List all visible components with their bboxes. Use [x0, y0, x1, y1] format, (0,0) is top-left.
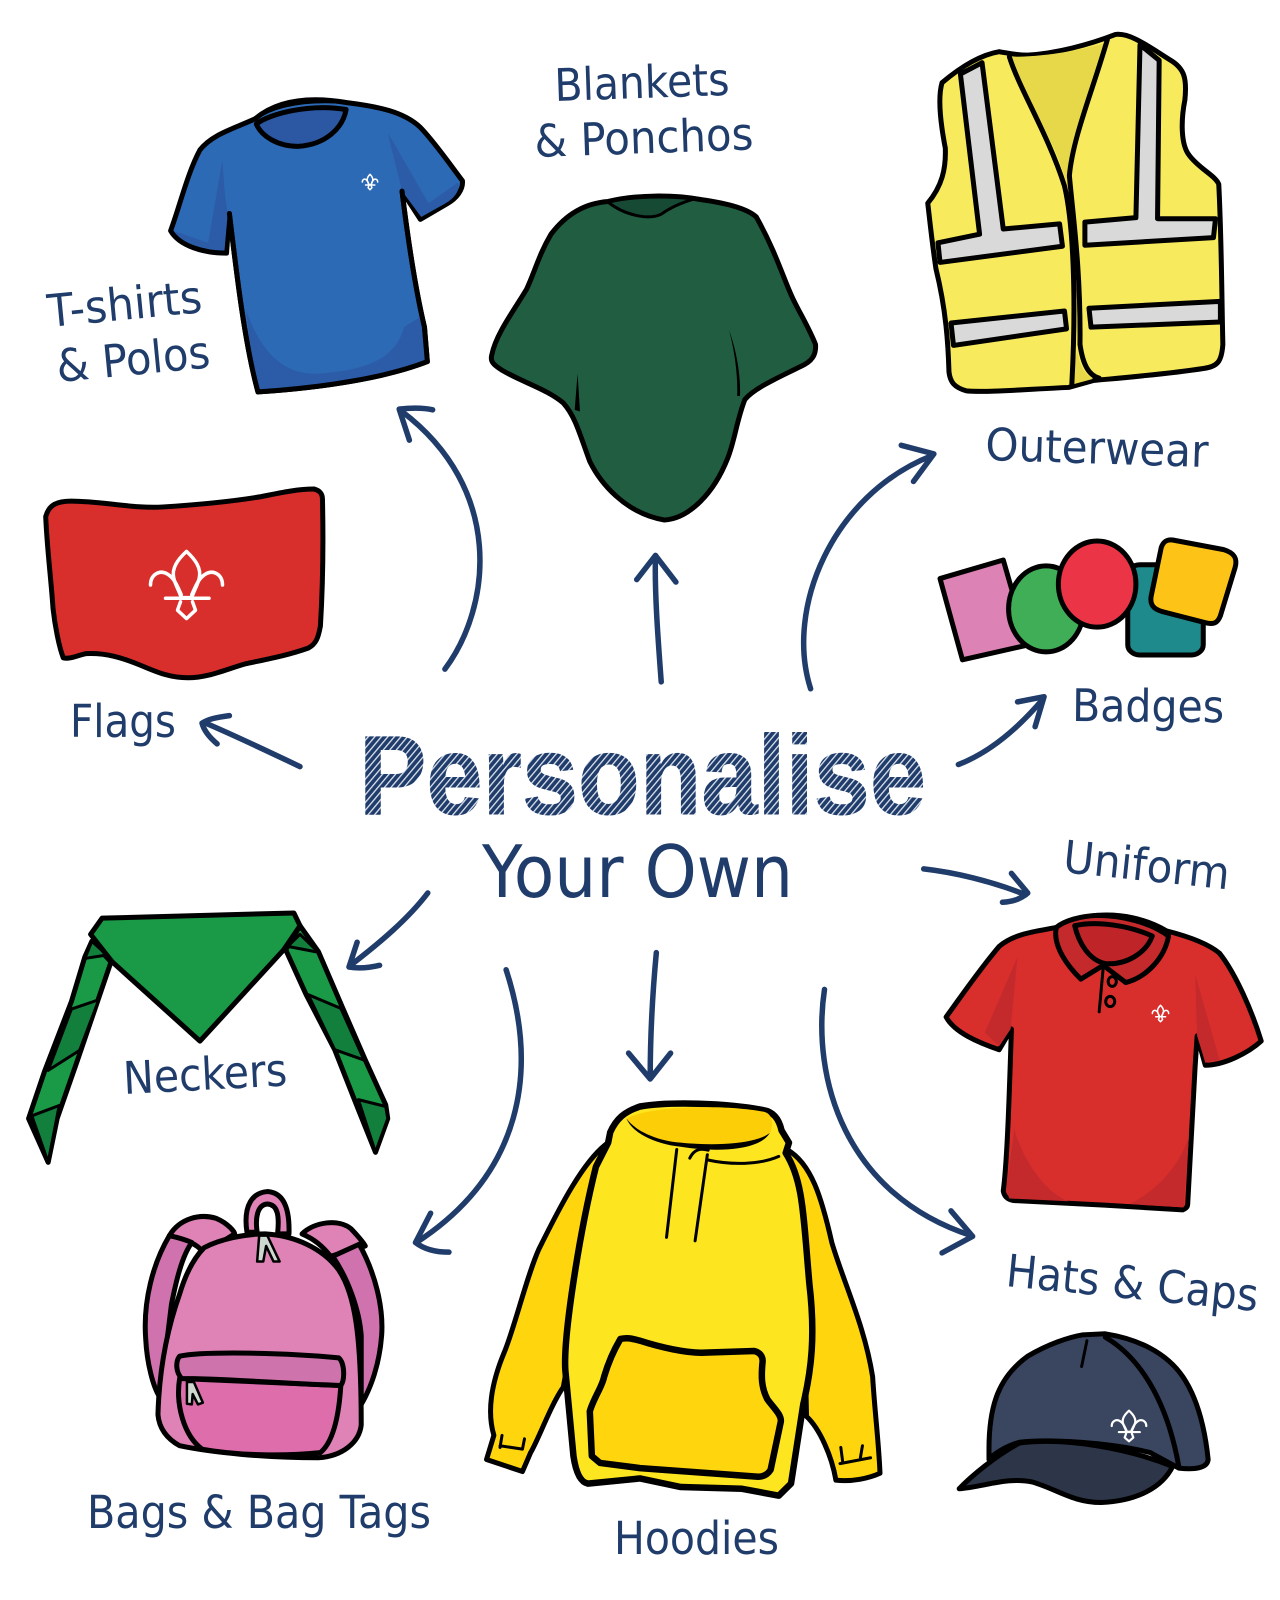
arrow to hoodies — [629, 953, 671, 1079]
icon: fleur-de-lis on cap — [1112, 1411, 1146, 1441]
icon: yellow hoodie — [487, 1103, 880, 1496]
icon: pink backpack — [145, 1192, 382, 1458]
icon: fleur-de-lis on t-shirt — [362, 174, 378, 190]
icon: fleur-de-lis on polo — [1152, 1005, 1169, 1022]
arrow to ponchos — [637, 555, 676, 682]
icon: badges — [940, 540, 1236, 660]
arrow to hats — [822, 989, 973, 1253]
icon: navy cap — [959, 1334, 1208, 1503]
icon: red polo shirt — [946, 915, 1261, 1210]
subtitle: Your Own — [481, 830, 793, 914]
label: hoodies: Hoodies — [614, 1512, 779, 1565]
icon: fleur-de-lis on flag — [150, 551, 222, 619]
label: hats and caps: Hats & Caps — [1004, 1244, 1261, 1322]
icon: green necker — [29, 913, 388, 1162]
label: badges: Badges — [1072, 679, 1224, 733]
label: uniform: Uniform — [1061, 830, 1232, 900]
label: outerwear: Outerwear — [985, 418, 1210, 478]
label: t-shirts and polos: & Polos — [54, 325, 212, 393]
icon: green poncho — [491, 196, 816, 520]
title: Personalise — [359, 713, 926, 838]
label: blankets and ponchos — [534, 53, 754, 168]
label: t-shirts and polos — [44, 270, 212, 393]
arrow to t-shirts — [399, 408, 480, 669]
label: t-shirts and polos: T-shirts — [44, 270, 204, 338]
label: neckers: Neckers — [122, 1043, 288, 1105]
arrow to bags — [416, 970, 521, 1252]
label: flags: Flags — [70, 695, 176, 748]
arrow to flags — [202, 716, 300, 767]
label: blankets and ponchos: Blankets — [554, 53, 730, 112]
arrow to outerwear — [804, 445, 934, 689]
arrow to badges — [958, 697, 1044, 765]
icon: blue t-shirt — [171, 100, 463, 392]
label: bags and bag tags: Bags & Bag Tags — [87, 1486, 431, 1539]
arrow to neckers — [349, 893, 428, 968]
arrow to uniform — [924, 869, 1028, 902]
label: blankets and ponchos: & Ponchos — [534, 107, 754, 168]
icon: hi-vis vest — [928, 34, 1223, 391]
icon: red flag — [46, 489, 323, 678]
